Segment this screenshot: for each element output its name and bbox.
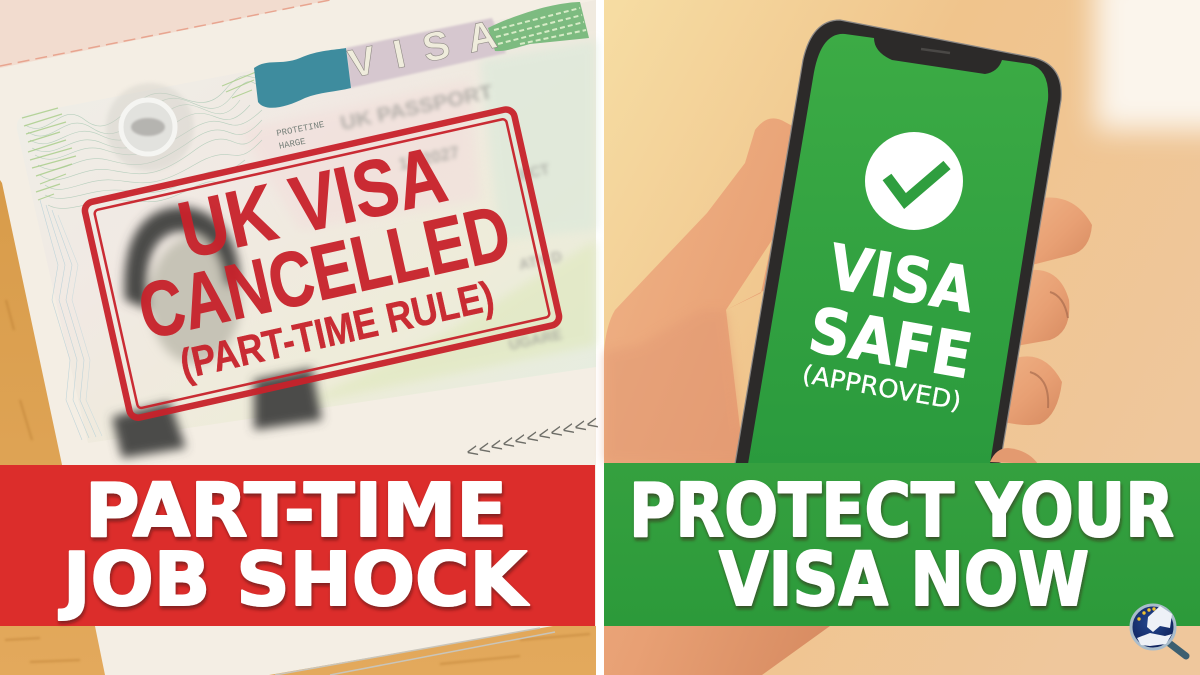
- passport page: [0, 0, 596, 675]
- wood grain: [5, 300, 590, 664]
- phone screen text: SAFE: [803, 293, 978, 393]
- phone: [734, 20, 1061, 470]
- blurred portrait: [112, 207, 322, 458]
- passport upper pink page: [0, 0, 330, 68]
- guilloche pattern: [25, 70, 264, 440]
- banner headline: PART-TIME: [85, 468, 507, 554]
- green fern ornament: [22, 72, 256, 200]
- printed label: HARGE: [278, 137, 307, 152]
- blurred window light: [1095, 0, 1200, 130]
- check icon: [865, 132, 963, 230]
- banner: part-time job shock: [0, 465, 595, 626]
- phone screen text: (APPROVED): [800, 359, 964, 416]
- fingertip over phone: [990, 448, 1038, 464]
- MRZ chevrons: <<<<<<<<<<<: [464, 413, 601, 466]
- stamp: UK visa cancelled: CANCELLED: [131, 188, 518, 356]
- blurred personal data: BCT: [517, 161, 551, 184]
- banner headline: JOB SHOCK: [58, 537, 530, 623]
- phone screen text: [800, 230, 980, 416]
- phone screen text: VISA: [823, 230, 980, 327]
- panel: phone approved photo: [604, 0, 1200, 675]
- blurred personal data: UGARE: [507, 326, 564, 354]
- blurred personal data: 13 2027: [397, 143, 461, 174]
- blurred personal data: [338, 81, 564, 354]
- banner: protect your visa now: [604, 463, 1200, 626]
- banner headline: [58, 468, 530, 623]
- VISA foil lettering: VISA: [345, 13, 501, 87]
- icon: globe magnifier logo: [1131, 605, 1186, 656]
- rainbow wash: [300, 240, 596, 405]
- green hologram: [488, 2, 589, 51]
- visa sticker: [17, 0, 601, 466]
- finger creases: [1030, 292, 1068, 408]
- printed label: PROTETINE: [276, 120, 325, 139]
- phone screen: [747, 34, 1048, 470]
- seal: [106, 83, 194, 171]
- speaker: [921, 49, 950, 53]
- panel: cancelled visa passport photo: [0, 0, 601, 675]
- stamp: UK visa cancelled: [83, 108, 561, 419]
- banner headline: VISA NOW: [719, 537, 1089, 623]
- banner headline: [629, 468, 1174, 623]
- blurred personal data: ATY D: [517, 248, 564, 274]
- hand palm and thumb: [604, 118, 830, 675]
- visa foil band: [254, 2, 589, 108]
- teal foil: [254, 48, 351, 108]
- fingers behind phone: [985, 198, 1092, 425]
- printed label: [276, 120, 328, 152]
- lower page edges: [275, 628, 555, 675]
- blurred personal data: UK PASSPORT: [338, 81, 495, 135]
- stamp: UK visa cancelled: (PART-TIME RULE): [176, 272, 498, 388]
- stamp: UK visa cancelled: UK VISA: [171, 129, 454, 275]
- phone body: [734, 20, 1061, 470]
